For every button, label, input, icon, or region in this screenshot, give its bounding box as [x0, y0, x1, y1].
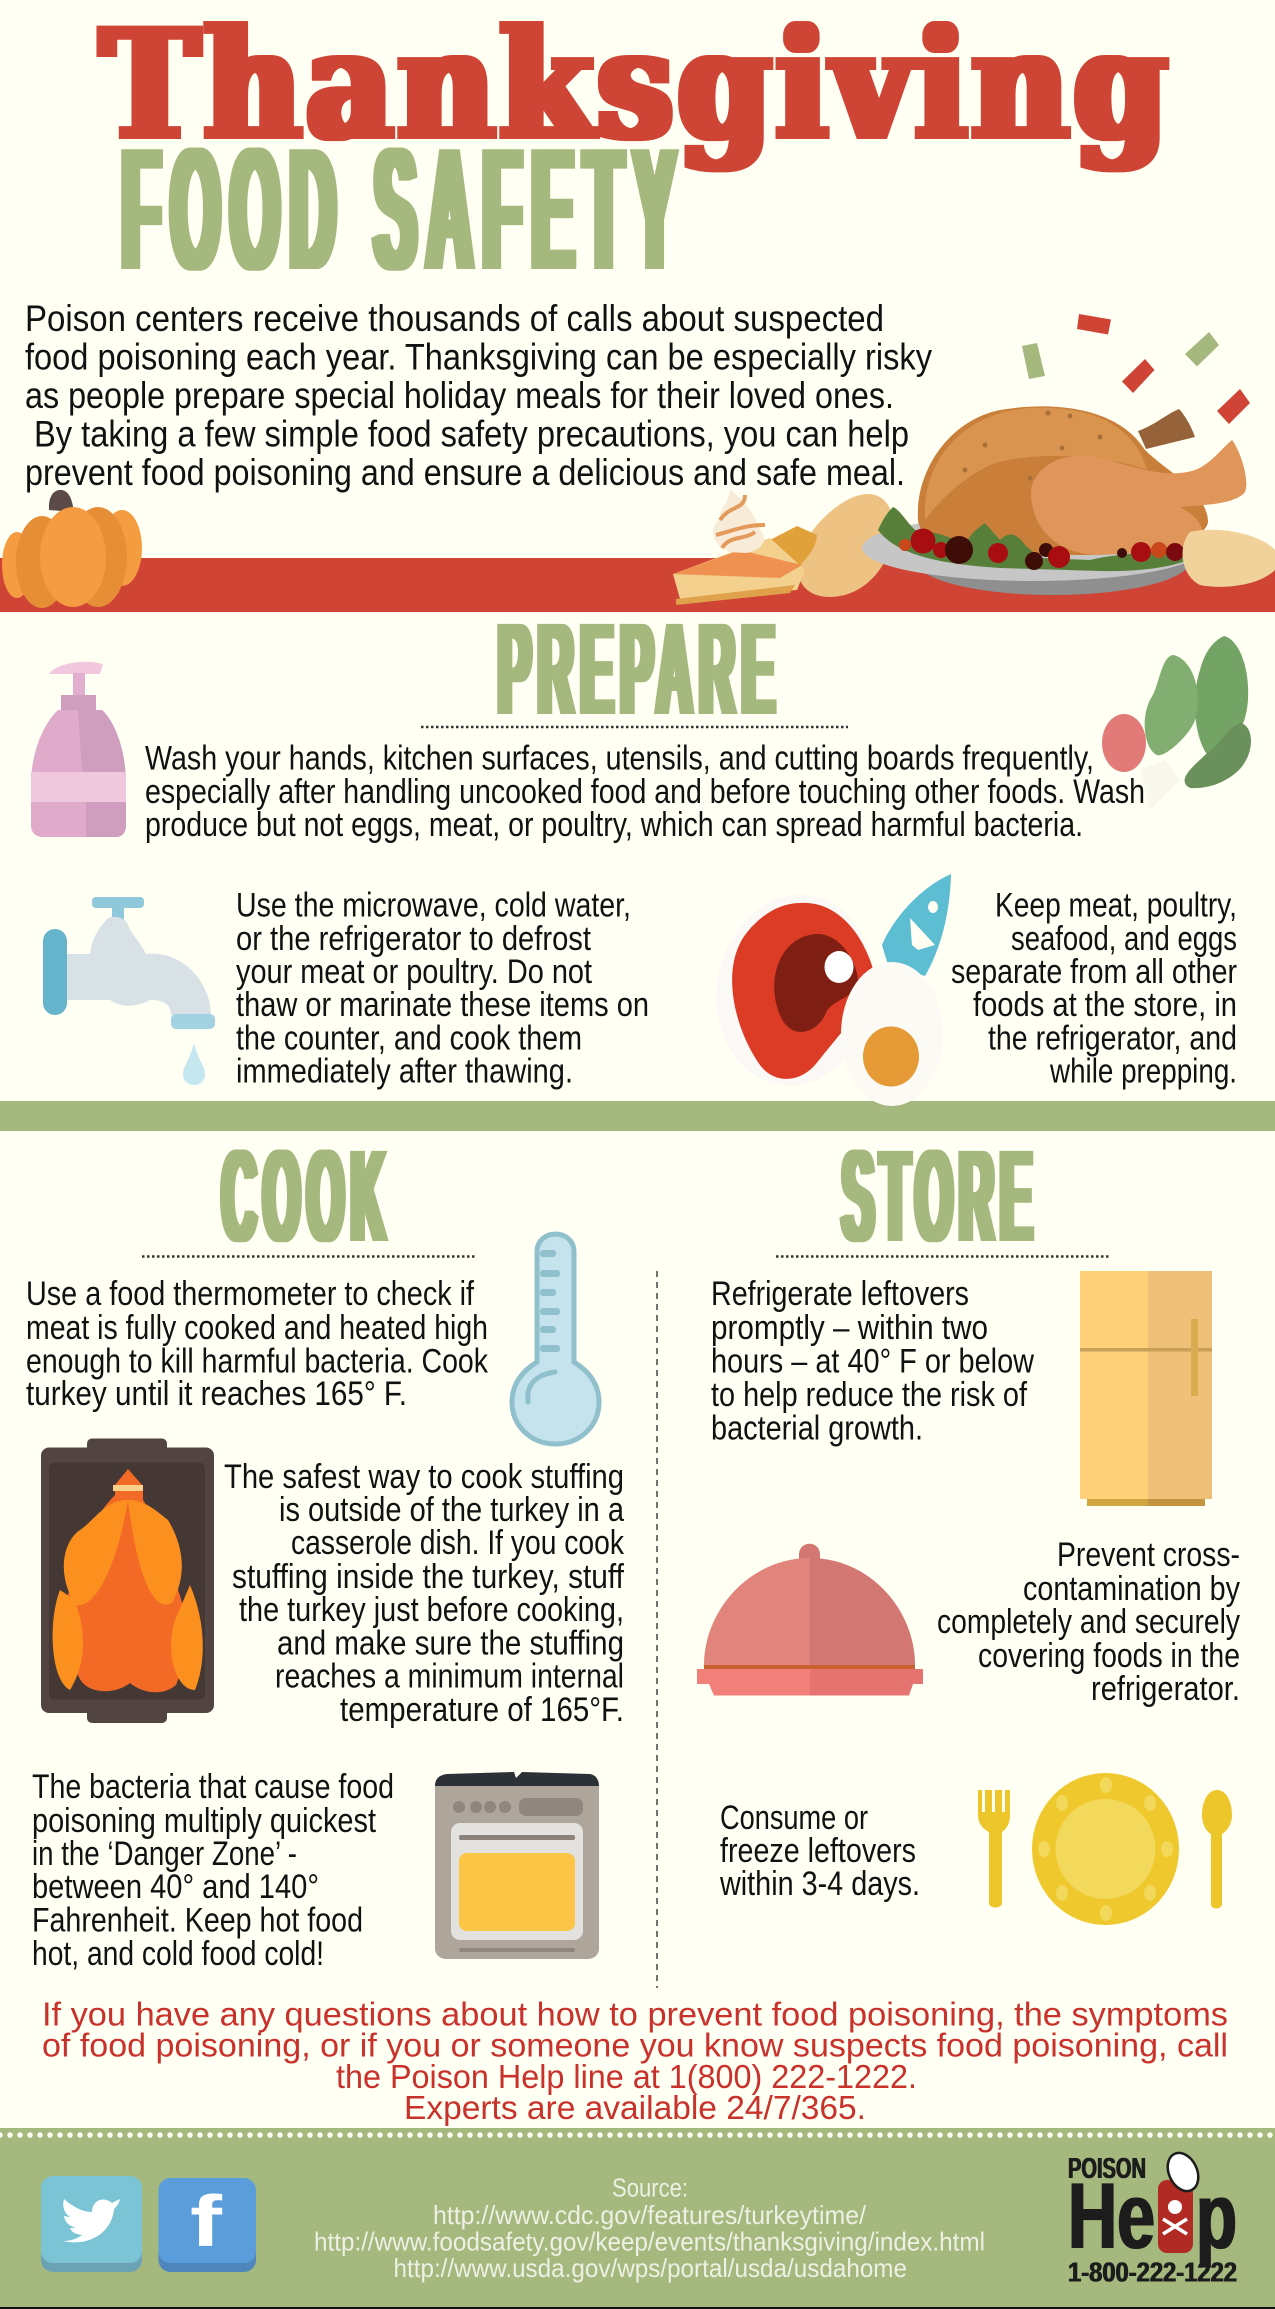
cook text: stuffing: and make sure the stuffing	[277, 1624, 624, 1662]
prepare text: keep separate	[951, 887, 1237, 1091]
logo: Poison Help: p	[1196, 2163, 1237, 2268]
icon: apple and leafy greens	[1102, 636, 1251, 810]
intro text block: prevent food poisoning and ensure a delicious and safe meal.	[25, 452, 905, 493]
callout: poison help message: the Poison Help line at 1(800) 222-1222.	[336, 2058, 917, 2095]
icon: faucet	[43, 897, 215, 1085]
cook text: danger zone: poisoning multiply quickest	[32, 1802, 376, 1840]
heading: Cook: COOK	[222, 1123, 392, 1269]
icon: pie	[673, 490, 817, 605]
store text: refrigerate: bacterial growth.	[711, 1410, 923, 1448]
cook text: stuffing: reaches a minimum internal	[275, 1658, 624, 1696]
title: Thanksgiving: Thanksgiving	[101, 0, 1173, 173]
cook text: thermometer: enough to kill harmful bacteria. Cook	[26, 1342, 489, 1380]
cook text: danger zone	[32, 1768, 394, 1973]
logo: Poison Help	[1068, 2148, 1237, 2288]
store text: prevent cross-contamination: contamination by	[1023, 1570, 1240, 1608]
cook text: thermometer: Use a food thermometer to check if	[26, 1275, 474, 1313]
callout: poison help message: Experts are available 24/7/365.	[404, 2089, 866, 2126]
callout: poison help message: If you have any questions about how to prevent food poisoning, the symptoms	[42, 1996, 1228, 2033]
store text: refrigerate: to help reduce the risk of	[711, 1376, 1027, 1414]
subtitle: Food Safety: FOOD SAFETY	[122, 112, 686, 306]
icon: oven	[435, 1772, 599, 1959]
prepare text: defrost: immediately after thawing.	[236, 1053, 573, 1091]
prepare text: wash hands: Wash your hands, kitchen surfaces, utensils, and cutting boards frequently,	[145, 740, 1094, 778]
source text block: http://www.usda.gov/wps/portal/usda/usdahome	[394, 2253, 907, 2283]
cook text: danger zone: in the ‘Danger Zone’ -	[32, 1835, 297, 1873]
store text: prevent cross-contamination	[937, 1536, 1240, 1708]
icon: left potato	[797, 494, 893, 597]
callout: poison help message: of food poisoning, or if you or someone you know suspects food poisoning, call	[42, 2027, 1228, 2064]
prepare text: defrost: your meat or poultry. Do not	[236, 953, 592, 991]
prepare text: wash hands: produce but not eggs, meat, or poultry, which can spread harmful bacteria.	[145, 806, 1083, 844]
cook text: stuffing: is outside of the turkey in a	[279, 1491, 624, 1529]
heading: Prepare: PREPARE	[498, 595, 782, 742]
store text: prevent cross-contamination: refrigerator.	[1091, 1670, 1240, 1708]
intro text block	[25, 298, 932, 493]
icon: facebook button	[158, 2178, 256, 2272]
cook text: stuffing: the turkey just before cooking,	[239, 1591, 624, 1629]
icon: pumpkin	[2, 490, 142, 608]
store text: consume	[719, 1799, 920, 1903]
icon: turkey in roasting pan	[41, 1438, 214, 1723]
icon: thermometer	[512, 1234, 599, 1444]
store text: refrigerate: promptly – within two	[711, 1309, 988, 1347]
cook text: danger zone: hot, and cold food cold!	[32, 1935, 324, 1973]
cook text: thermometer: turkey until it reaches 165° F.	[26, 1375, 407, 1413]
cook text: danger zone: Fahrenheit. Keep hot food	[32, 1902, 363, 1940]
prepare text: defrost: or the refrigerator to defrost	[236, 920, 591, 958]
footer band	[0, 2128, 1275, 2307]
store text: refrigerate	[711, 1275, 1034, 1448]
icon: soap bottle	[31, 662, 126, 837]
store text: prevent cross-contamination: Prevent cross-	[1057, 1536, 1240, 1574]
callout: poison help message	[42, 1996, 1228, 2126]
icon: steak, fish and egg	[702, 874, 951, 1106]
green divider band	[0, 1101, 1275, 1131]
logo: Poison Help: He	[1068, 2163, 1155, 2268]
prepare text: defrost	[236, 887, 649, 1091]
store text: consume: Consume or	[720, 1799, 868, 1837]
intro text block: as people prepare special holiday meals for their loved ones.	[25, 375, 894, 416]
logo: Poison Help: POISON	[1068, 2153, 1146, 2185]
red table band	[0, 558, 1275, 612]
prepare text: wash hands	[145, 740, 1145, 844]
icon: right potato	[1183, 530, 1275, 587]
cook text: stuffing: casserole dish. If you cook	[291, 1524, 625, 1562]
cook text: stuffing	[224, 1458, 625, 1729]
logo: Poison Help: 1-800-222-1222	[1068, 2257, 1237, 2288]
cook text: danger zone: The bacteria that cause food	[32, 1768, 394, 1806]
icon: refrigerator	[1080, 1271, 1212, 1506]
source text block	[314, 2173, 985, 2283]
icon: twitter button	[41, 2176, 142, 2272]
intro text block: By taking a few simple food safety precautions, you can help	[34, 414, 909, 454]
cook text: thermometer: meat is fully cooked and heated high	[26, 1309, 488, 1347]
intro text block: food poisoning each year. Thanksgiving can be especially risky	[25, 336, 932, 378]
icon: food cloche	[697, 1544, 923, 1696]
store text: refrigerate: Refrigerate leftovers	[711, 1275, 969, 1313]
cook text: stuffing: temperature of 165°F.	[340, 1691, 624, 1729]
icon: confetti	[1022, 314, 1250, 424]
prepare text: keep separate: foods at the store, in	[973, 986, 1237, 1024]
cook text: danger zone: between 40° and 140°	[32, 1868, 319, 1906]
icon: facebook button: f	[190, 2182, 223, 2262]
cook text: stuffing: The safest way to cook stuffing	[224, 1458, 624, 1496]
intro text block: Poison centers receive thousands of calls about suspected	[25, 298, 884, 339]
prepare text: defrost: Use the microwave, cold water,	[236, 887, 631, 925]
icon: plate and cutlery	[978, 1773, 1232, 1925]
prepare text: defrost: thaw or marinate these items on	[236, 986, 649, 1024]
source text block: http://www.cdc.gov/features/turkeytime/	[433, 2200, 867, 2230]
store text: consume: freeze leftovers	[720, 1832, 916, 1870]
source text block: Source:	[612, 2173, 688, 2203]
prepare text: keep separate: while prepping.	[1049, 1053, 1237, 1091]
store text: refrigerate: hours – at 40° F or below	[711, 1342, 1034, 1380]
heading: Store: STORE	[842, 1123, 1039, 1269]
icon: roast turkey on plate	[862, 406, 1246, 595]
cook text: thermometer	[26, 1275, 489, 1413]
cook text: stuffing: stuffing inside the turkey, stuff	[232, 1558, 624, 1596]
prepare text: defrost: the counter, and cook them	[236, 1019, 582, 1057]
store text: consume: within 3-4 days.	[719, 1865, 920, 1903]
source text block: http://www.foodsafety.gov/keep/events/thanksgiving/index.html	[314, 2227, 985, 2257]
